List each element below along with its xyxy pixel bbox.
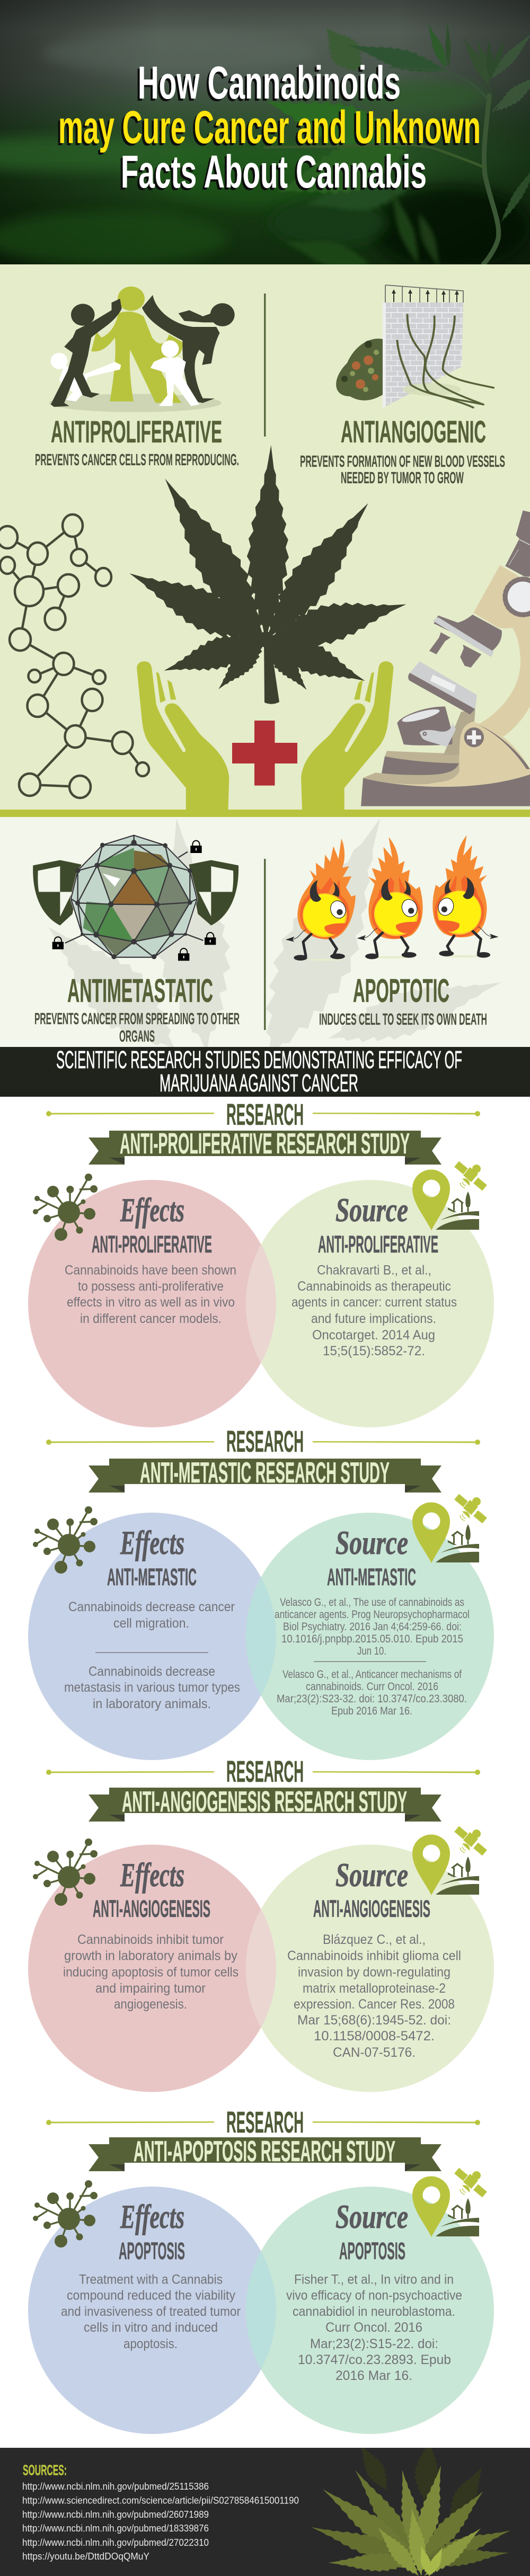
panel: header xyxy=(0,0,530,278)
heading: antimetastatic: ANTIMETASTATIC xyxy=(67,973,213,1009)
panel: research study 4: RESEARCH xyxy=(226,2106,304,2139)
venn circles xyxy=(28,1513,494,1760)
icon: source pin and satellite xyxy=(412,1494,487,1563)
panel: research study 3 xyxy=(28,1755,494,2092)
effects body text: and invasiveness of treated tumor xyxy=(61,2304,241,2319)
venn circles xyxy=(28,1845,494,2092)
source body text: Cannabinoids inhibit glioma cell xyxy=(287,1949,461,1964)
panel: research study 2: ANTI-METASTIC xyxy=(107,1564,197,1591)
divider xyxy=(264,859,266,1030)
effects body text: compound reduced the viability xyxy=(67,2288,235,2303)
effects body text: in different cancer models. xyxy=(80,1311,222,1326)
icon: effects virus xyxy=(33,1838,98,1906)
icon: effects virus xyxy=(33,2180,98,2248)
divider bar xyxy=(0,810,530,817)
sources list xyxy=(22,2481,299,2562)
text: antiproliferative description: PREVENTS CANCER CELLS FROM REPRODUCING. xyxy=(35,450,239,469)
plant leaves xyxy=(258,17,530,264)
research line divider xyxy=(46,1111,480,1116)
source body text: Jun 10. xyxy=(357,1645,386,1657)
source label: Source xyxy=(335,1524,408,1561)
source body text: invasion by down-regulating xyxy=(298,1965,450,1979)
text: antiangiogenic description xyxy=(300,452,505,487)
source body text: Biol Psychiatry. 2016 Jan 4;64:259-66. doi: xyxy=(283,1621,462,1633)
source label: Source xyxy=(335,1191,408,1229)
source body text: Oncotarget. 2014 Aug xyxy=(312,1328,435,1343)
source body text: 2016 Mar 16. xyxy=(335,2368,412,2383)
icon: fighting figures xyxy=(49,287,235,412)
effects body text: Cannabinoids have been shown xyxy=(65,1263,236,1278)
sources list: http://www.ncbi.nlm.nih.gov/pubmed/26071989 xyxy=(22,2509,209,2520)
panel: research study 4: APOPTOSIS xyxy=(339,2237,405,2264)
icon: source pin and satellite xyxy=(412,1826,487,1895)
source body text xyxy=(286,2272,462,2383)
panel: top green section xyxy=(0,264,530,810)
effects body text xyxy=(64,1600,240,1711)
effects label: Effects xyxy=(120,1524,184,1561)
effects body text: effects in vitro as well as in vivo xyxy=(67,1295,235,1310)
source body text: 10.1158/0008-5472. xyxy=(314,2029,435,2044)
source label: Source xyxy=(335,2198,408,2235)
effects body text: to possess anti-proliferative xyxy=(78,1279,224,1294)
text: antimetastatic description: ORGANS xyxy=(119,1027,155,1045)
source body text: anticancer agents. Prog Neuropsychopharmacol xyxy=(275,1609,470,1621)
title xyxy=(58,65,479,190)
effects body text: growth in laboratory animals by xyxy=(64,1949,237,1964)
source body text: Blázquez C., et al., xyxy=(323,1932,426,1947)
effects body text: apoptosis. xyxy=(123,2337,178,2351)
source body text: Mar;23(2):S23-32. doi: 10.3747/co.23.3080. xyxy=(277,1693,467,1705)
source body text: Cannabinoids as therapeutic xyxy=(297,1279,451,1294)
source body text: matrix metalloproteinase-2 xyxy=(303,1981,446,1996)
ribbon banner xyxy=(89,1459,441,1493)
text: antimetastatic description: PREVENTS CANCER FROM SPREADING TO OTHER xyxy=(34,1009,240,1028)
source body text: cannabidiol in neuroblastoma. xyxy=(293,2304,455,2319)
icon: source pin and satellite xyxy=(412,2168,487,2237)
effects body text: cell migration. xyxy=(113,1616,189,1631)
source body text: Epub 2016 Mar 16. xyxy=(331,1705,412,1717)
panel: research study 2: ANTI-METASTIC xyxy=(327,1564,416,1591)
source body text: cannabinoids. Curr Oncol. 2016 xyxy=(306,1681,438,1693)
panel: research study 2: RESEARCH xyxy=(226,1425,304,1459)
panel: research study 1: ANTI-PROLIFERATIVE xyxy=(92,1231,212,1258)
panel: lower section xyxy=(0,817,530,1047)
source body text: Velasco G., et al., The use of cannabinoids as xyxy=(280,1596,464,1609)
panel: research study 4 xyxy=(28,2106,494,2434)
effects body text: Treatment with a Cannabis xyxy=(79,2272,223,2287)
icon: globe with shields and locks xyxy=(33,836,238,961)
panel: white research area xyxy=(0,1097,530,2448)
panel: research study 1: RESEARCH xyxy=(226,1098,304,1132)
effects label: Effects xyxy=(120,1856,184,1894)
source body text: Chakravarti B., et al., xyxy=(317,1263,431,1278)
icon: right hand xyxy=(301,661,393,810)
source body text: and future implications. xyxy=(311,1311,436,1326)
effects body text xyxy=(61,2272,241,2351)
source body text: 10.3747/co.23.2893. Epub xyxy=(298,2352,451,2367)
icon: molecule network xyxy=(0,514,149,798)
source body text: vivo efficacy of non-psychoactive xyxy=(286,2288,462,2303)
source body text xyxy=(292,1263,457,1358)
panel: research study 3: ANTI-ANGIOGENESIS xyxy=(93,1895,210,1922)
effects body text: angiogenesis. xyxy=(114,1997,187,2012)
panel: research study 2 xyxy=(28,1425,494,1760)
panel: research study 1 xyxy=(28,1098,494,1427)
divider xyxy=(264,294,266,437)
effects body text: inducing apoptosis of tumor cells xyxy=(63,1965,238,1979)
research line divider xyxy=(46,2120,480,2125)
sources list: http://www.ncbi.nlm.nih.gov/pubmed/18339876 xyxy=(22,2523,209,2534)
source body text: expression. Cancer Res. 2008 xyxy=(294,1997,455,2012)
panel: research study 3: RESEARCH xyxy=(226,1755,304,1789)
effects body text: in laboratory animals. xyxy=(93,1696,211,1711)
icon: three flaming devils xyxy=(286,832,499,961)
sources list: http://www.ncbi.nlm.nih.gov/pubmed/27022310 xyxy=(22,2537,209,2548)
source body text: Mar;23(2):S15-22. doi: xyxy=(310,2337,438,2351)
footer cannabis plant xyxy=(312,2448,510,2576)
venn circles xyxy=(28,1180,494,1427)
source body text: Velasco G., et al., Anticancer mechanisms of xyxy=(282,1668,462,1681)
venn circles xyxy=(28,2187,494,2434)
ribbon banner xyxy=(89,2137,441,2171)
icon: source pin and satellite xyxy=(412,1161,487,1230)
effects body text: cells in vitro and induced xyxy=(84,2320,218,2335)
icon: effects virus xyxy=(33,1506,98,1574)
source body text: CAN-07-5176. xyxy=(333,2045,416,2060)
icon: cannabis leaf xyxy=(120,445,411,704)
effects body text: Cannabinoids decrease xyxy=(89,1664,215,1679)
source label: Source xyxy=(335,1856,408,1894)
source body text: 15;5(15):5852-72. xyxy=(323,1344,425,1358)
icon: microscope xyxy=(361,510,530,806)
background leaf watermark xyxy=(49,818,501,1047)
icon: effects virus xyxy=(33,1174,98,1241)
research line divider xyxy=(46,1440,480,1445)
source body text xyxy=(275,1596,470,1717)
effects body text xyxy=(65,1263,236,1326)
source body text: Mar 15;68(6):1945-52. doi: xyxy=(297,2013,451,2028)
panel: footer sources xyxy=(0,2436,530,2576)
effects label: Effects xyxy=(120,2198,184,2235)
source body text: 10.1016/j.pnpbp.2015.05.010. Epub 2015 xyxy=(281,1633,463,1645)
effects body text: and impairing tumor xyxy=(95,1981,206,1996)
effects body text: metastasis in various tumor types xyxy=(64,1680,240,1695)
source body text xyxy=(287,1932,461,2060)
sources list: http://www.ncbi.nlm.nih.gov/pubmed/25115386 xyxy=(22,2481,209,2492)
effects body text: Cannabinoids inhibit tumor xyxy=(77,1932,224,1947)
icon: brick wall with vessels and bud xyxy=(336,285,493,408)
panel: black banner xyxy=(0,1046,530,1097)
effects body text: Cannabinoids decrease cancer xyxy=(68,1600,235,1614)
ribbon banner xyxy=(89,1131,441,1165)
panel: research study 4: APOPTOSIS xyxy=(119,2237,185,2264)
research line divider xyxy=(46,1770,480,1775)
source body text: agents in cancer: current status xyxy=(292,1295,457,1310)
icon: red cross xyxy=(232,721,297,786)
sources heading: SOURCES: xyxy=(23,2462,67,2479)
panel: black banner: MARIJUANA AGAINST CANCER xyxy=(160,1069,358,1097)
source body text: Fisher T., et al., In vitro and in xyxy=(294,2272,454,2287)
sources list: https://youtu.be/DttdDOqQMuY xyxy=(22,2551,149,2562)
heading: antiproliferative: ANTIPROLIFERATIVE xyxy=(51,415,222,449)
effects label: Effects xyxy=(120,1191,184,1229)
source body text: Curr Oncol. 2016 xyxy=(325,2320,422,2335)
icon: left hand xyxy=(137,661,229,810)
effects body text xyxy=(63,1932,238,2012)
sources list: http://www.sciencedirect.com/science/article/pii/S0278584615001190 xyxy=(22,2495,299,2506)
text: antimetastatic description xyxy=(34,1009,240,1045)
ribbon banner xyxy=(89,1788,441,1822)
